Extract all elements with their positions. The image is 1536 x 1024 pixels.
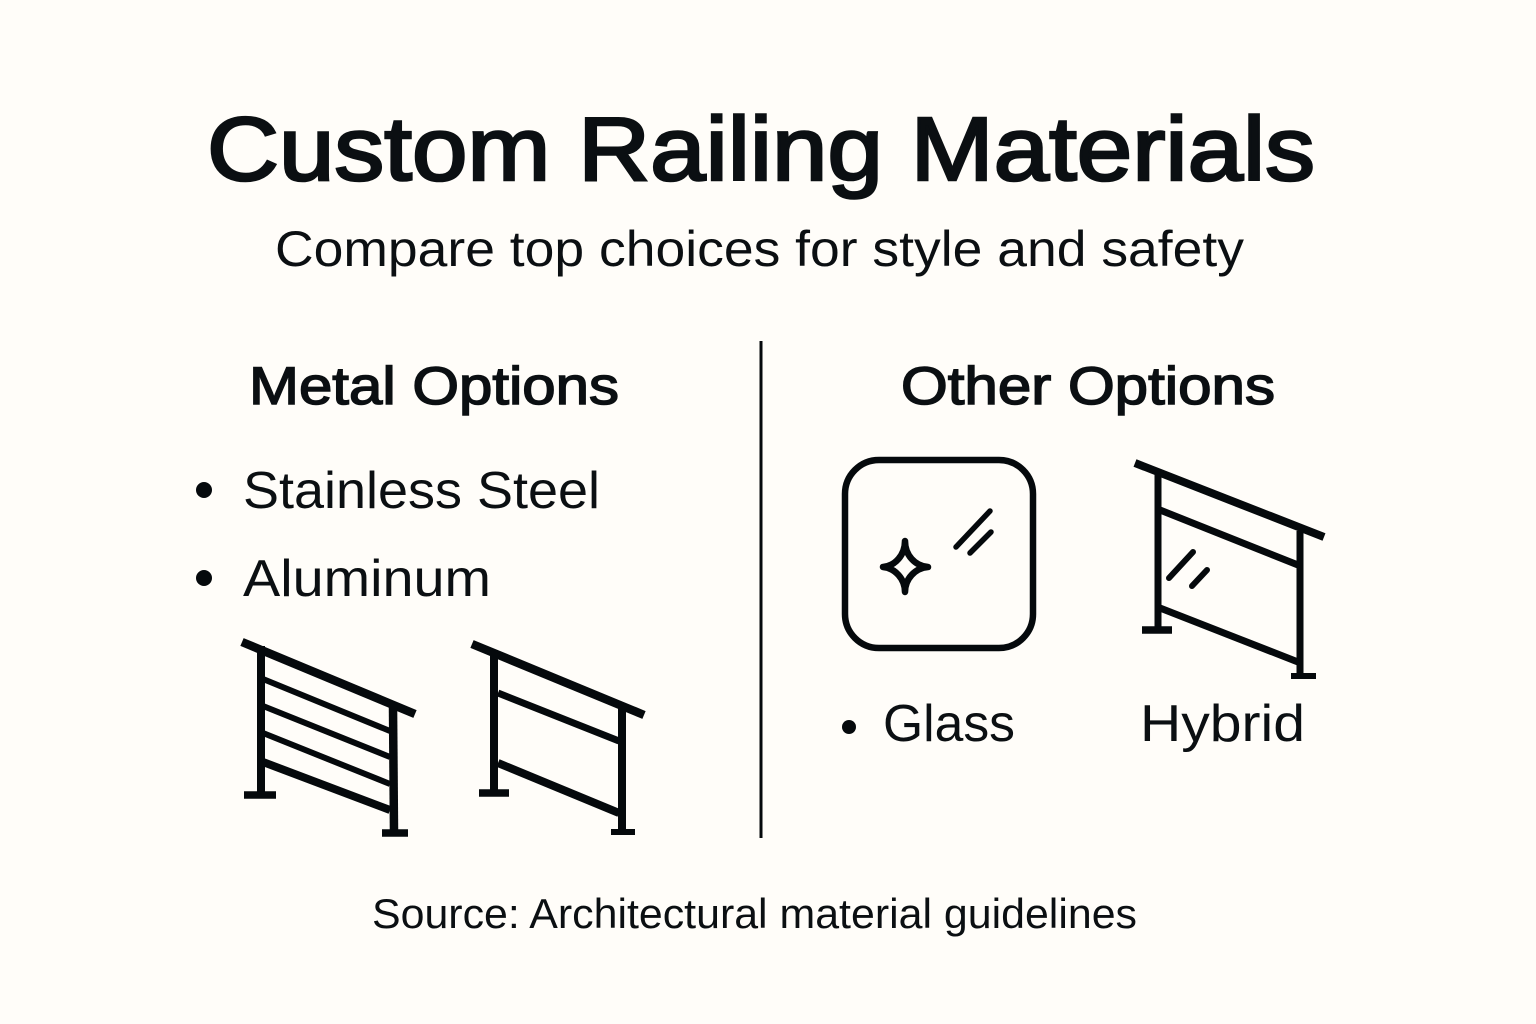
panel: other options	[842, 357, 1324, 753]
heading: other options: Other Options	[901, 357, 1275, 416]
icon: railing with four horizontal bars	[242, 642, 415, 833]
panel: metal options	[196, 357, 644, 833]
list item: stainless steel: Stainless Steel	[243, 462, 600, 520]
subtitle: Compare top choices for style and safety	[275, 221, 1244, 277]
list item: aluminum: Aluminum	[243, 550, 491, 608]
icon: glass panel	[845, 460, 1033, 648]
divider	[760, 341, 762, 838]
icon: railing with two horizontal bars	[472, 644, 644, 832]
label: hybrid: Hybrid	[1140, 695, 1305, 753]
heading: metal options: Metal Options	[249, 357, 619, 416]
label: glass: Glass	[883, 695, 1015, 753]
title: Custom Railing Materials	[207, 100, 1315, 200]
icon: hybrid railing with glass	[1135, 463, 1324, 676]
source note: Source: Architectural material guidelines	[372, 890, 1137, 937]
